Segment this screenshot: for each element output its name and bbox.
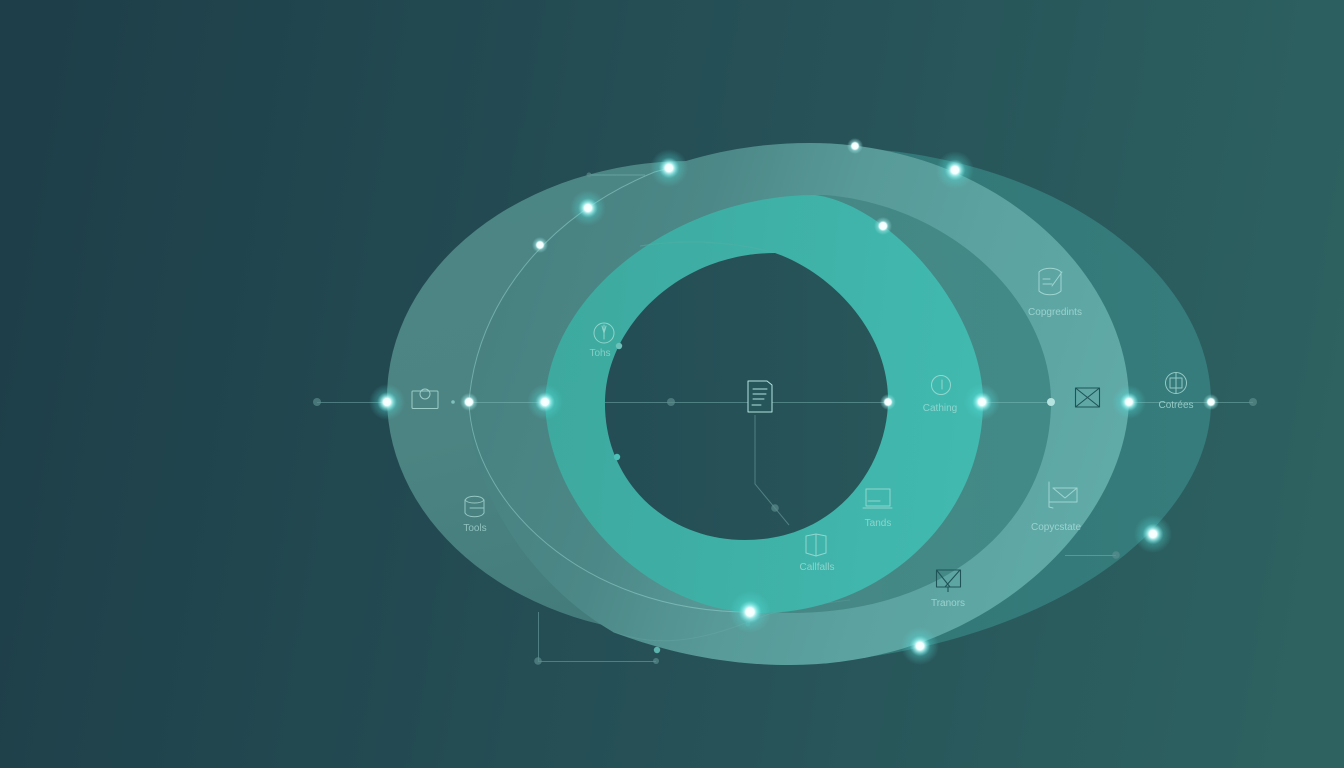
icon: framed chart xyxy=(936,570,960,592)
central hole xyxy=(605,253,888,540)
label: tools lower xyxy=(463,496,487,534)
icon: notepad and pen xyxy=(1039,268,1062,295)
label: tands xyxy=(863,489,892,529)
light middle ring xyxy=(469,143,1129,665)
text: cathing: Cathing xyxy=(923,403,957,414)
text: copycstate: Copycstate xyxy=(1031,522,1081,533)
icon: envelope xyxy=(1076,388,1100,407)
label: cathing xyxy=(923,376,957,414)
label: copgredints xyxy=(1028,268,1082,318)
text: copgredints: Copgredints xyxy=(1028,307,1082,318)
icon: laptop xyxy=(863,489,892,508)
icon: dial xyxy=(932,376,950,394)
label: camera-side tools xyxy=(589,323,614,359)
text: tands: Tands xyxy=(865,518,891,529)
label: tranors xyxy=(931,570,965,609)
label: cotrees xyxy=(1158,372,1194,411)
glowing nodes xyxy=(369,138,1219,665)
label: callfalls xyxy=(799,534,835,573)
outer left ring xyxy=(387,161,993,635)
connector lines xyxy=(317,175,1253,662)
text: callfalls: Callfalls xyxy=(799,562,835,573)
teal inner ring xyxy=(545,195,983,613)
icon: globe xyxy=(1166,372,1186,394)
text: tranors: Tranors xyxy=(931,598,965,609)
dark band inside light ring xyxy=(640,195,1051,613)
concentric ring diagram xyxy=(387,143,1211,665)
label: copycstate xyxy=(1031,482,1081,533)
icon: open book xyxy=(806,534,826,556)
icon: camera xyxy=(412,389,438,408)
thin outline of middle ring xyxy=(469,168,750,612)
icon: envelope with flag xyxy=(1049,482,1077,508)
icon: center document xyxy=(748,381,772,412)
text: cotrees: Cotrées xyxy=(1158,400,1194,411)
icon: cylinder xyxy=(465,496,484,517)
text: tools upper: Tohs xyxy=(589,348,611,359)
dim connector dots xyxy=(313,172,1257,665)
outer right ring xyxy=(700,147,1211,665)
teal highlight arc xyxy=(640,242,775,253)
text: tools lower: Tools xyxy=(463,523,487,534)
faint lower arc of left ring xyxy=(613,600,850,641)
icon: clock xyxy=(594,323,614,343)
